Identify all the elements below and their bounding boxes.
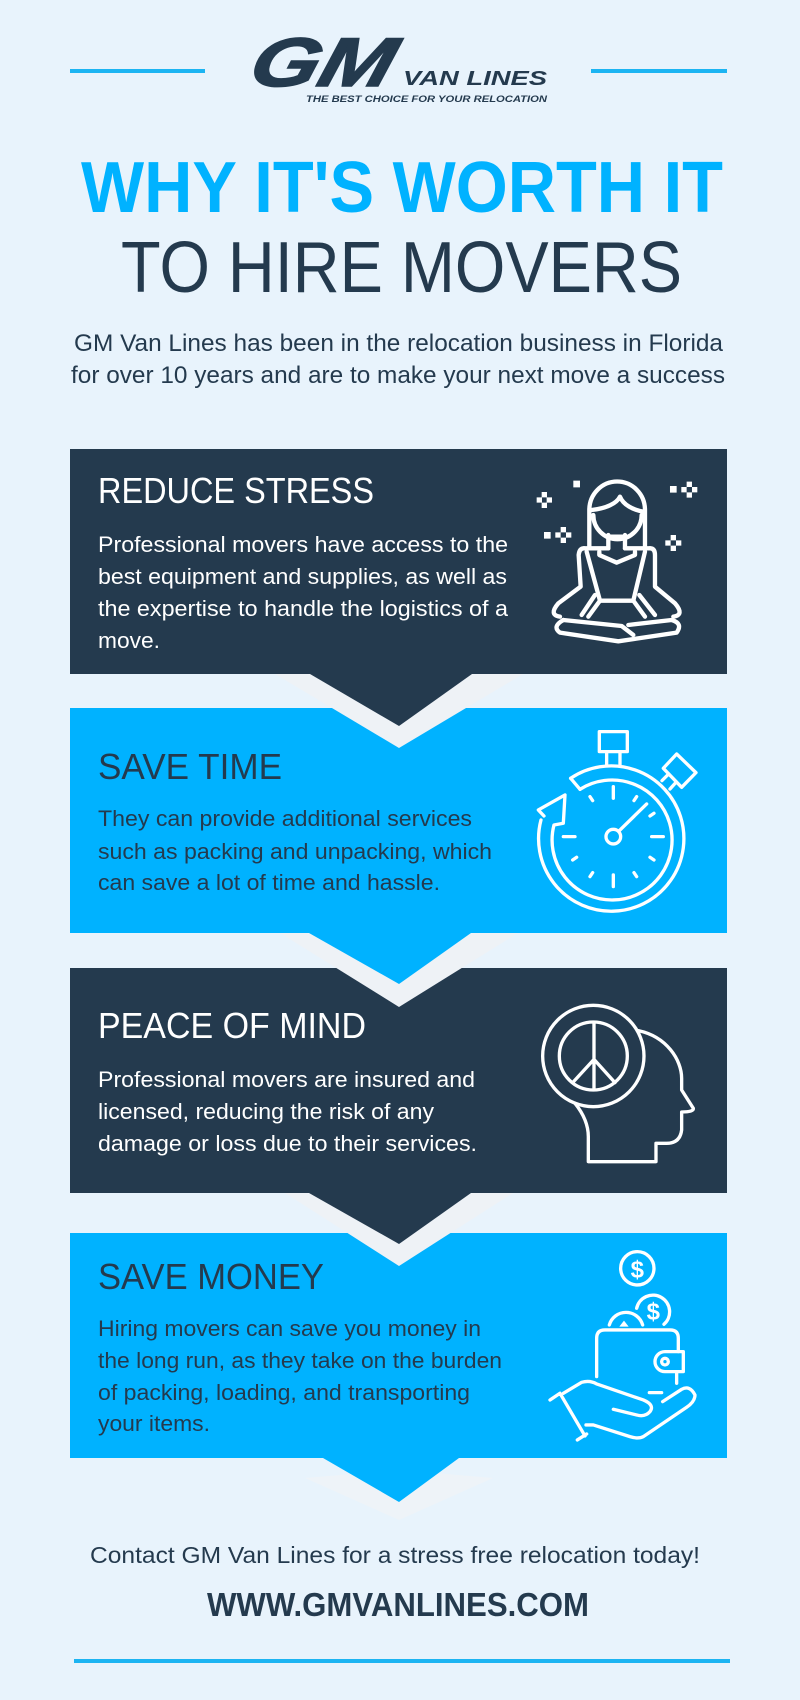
chevron: peace of mind bbox=[309, 1193, 471, 1244]
title: TO HIRE MOVERS bbox=[121, 227, 682, 308]
chevron: reduce stress bbox=[310, 674, 472, 726]
body: save money: of packing, loading, and transporting bbox=[98, 1380, 470, 1405]
logo: GM Van Lines: GM bbox=[242, 23, 408, 101]
body: peace of mind: Professional movers are insured and bbox=[98, 1067, 475, 1092]
logo: GM Van Lines bbox=[242, 23, 548, 105]
panel: reduce stress bbox=[70, 449, 727, 748]
chevron: save money bbox=[323, 1458, 459, 1502]
panel background: save money bbox=[70, 1233, 727, 1458]
icon: wallet in hand with coins: $ bbox=[647, 1298, 660, 1325]
chevron: save time bbox=[309, 933, 471, 984]
panel: peace of mind bbox=[70, 968, 727, 1266]
body: save time bbox=[98, 806, 492, 895]
body: peace of mind: licensed, reducing the risk of any bbox=[98, 1099, 434, 1124]
panel: save money bbox=[70, 1233, 727, 1520]
panel background: save time bbox=[70, 708, 727, 933]
heading: save money: SAVE MONEY bbox=[98, 1256, 324, 1297]
body: save money bbox=[98, 1316, 502, 1436]
intro text: for over 10 years and are to make your next move a success bbox=[71, 362, 725, 389]
icon: head with peace sign bbox=[543, 1005, 693, 1162]
panel: save time bbox=[70, 708, 727, 1007]
icon: wallet in hand with coins bbox=[550, 1252, 695, 1440]
body: save time: can save a lot of time and hassle. bbox=[98, 870, 440, 895]
sparkles bbox=[537, 481, 697, 551]
body: reduce stress: Professional movers have access to the bbox=[98, 532, 508, 557]
heading: peace of mind: PEACE OF MIND bbox=[98, 1005, 366, 1046]
heading: reduce stress: REDUCE STRESS bbox=[98, 470, 374, 511]
footer line bbox=[74, 1659, 730, 1663]
heading: save time: SAVE TIME bbox=[98, 746, 282, 787]
header line right bbox=[591, 69, 727, 73]
website url: WWW.GMVANLINES.COM bbox=[207, 1586, 589, 1623]
body: save time: They can provide additional services bbox=[98, 806, 472, 831]
icon: wallet in hand with coins: $ bbox=[631, 1257, 644, 1284]
logo: GM Van Lines: VAN LINES bbox=[403, 68, 548, 90]
logo: GM Van Lines: THE BEST CHOICE FOR YOUR RELOCATION bbox=[306, 94, 548, 105]
body: save money: your items. bbox=[98, 1411, 210, 1436]
panel background: peace of mind bbox=[70, 968, 727, 1193]
body: reduce stress: the expertise to handle the logistics of a bbox=[98, 596, 509, 621]
connector gap bbox=[275, 674, 523, 748]
body: peace of mind bbox=[98, 1067, 477, 1156]
body: save money: the long run, as they take on the burden bbox=[98, 1348, 502, 1373]
icon: meditating person bbox=[537, 481, 697, 641]
panel background: reduce stress bbox=[70, 449, 727, 674]
connector shadow bbox=[280, 933, 518, 1007]
title: WHY IT'S WORTH IT bbox=[81, 147, 723, 228]
body: save time: such as packing and unpacking, which bbox=[98, 839, 492, 864]
connector shadow bbox=[305, 1470, 493, 1520]
intro text: GM Van Lines has been in the relocation business in Florida bbox=[74, 330, 724, 357]
header line left bbox=[70, 69, 205, 73]
connector gap bbox=[285, 1193, 513, 1266]
body: reduce stress: move. bbox=[98, 628, 160, 653]
body: peace of mind: damage or loss due to their services. bbox=[98, 1131, 477, 1156]
title bbox=[81, 147, 723, 308]
icon: stopwatch bbox=[538, 732, 696, 911]
closing text: Contact GM Van Lines for a stress free relocation today! bbox=[90, 1542, 700, 1568]
body: reduce stress bbox=[98, 532, 509, 653]
intro text bbox=[71, 330, 725, 389]
body: save money: Hiring movers can save you money in bbox=[98, 1316, 481, 1341]
body: reduce stress: best equipment and supplies, as well as bbox=[98, 564, 507, 589]
